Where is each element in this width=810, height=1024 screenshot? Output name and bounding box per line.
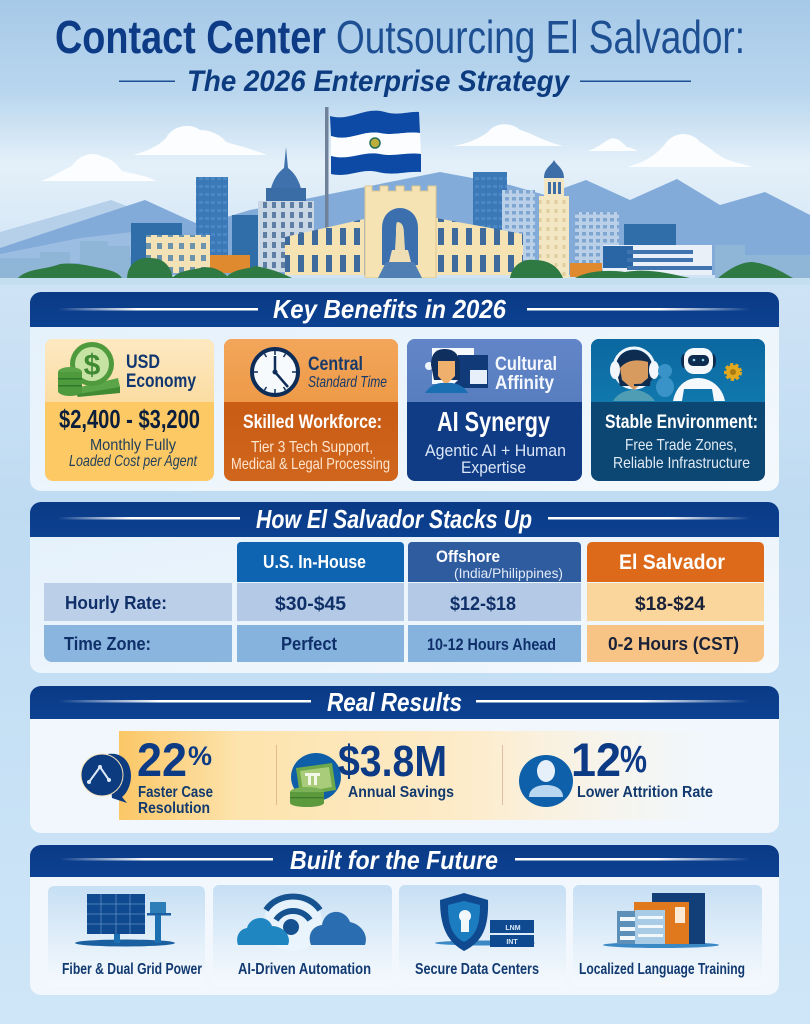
flag pole (325, 107, 328, 232)
icon: money (58, 342, 120, 397)
text: stable environment: Stable Environment: (605, 412, 758, 433)
row: hourly rate: $12-$18 (450, 594, 516, 615)
stat: $3.8M annual savings: Annual Savings (348, 784, 454, 801)
card: USD economy (45, 339, 214, 481)
heading: built for the future: Built for the Future (290, 845, 498, 875)
text: stable environment (605, 412, 758, 472)
title: Contact Center (55, 11, 326, 63)
icon: buildings (603, 893, 719, 948)
card: skilled workforce (224, 339, 398, 481)
waterfront strip (0, 278, 810, 285)
row: hourly rate: $30-$45 (275, 594, 346, 615)
column header: U.S. in-house: U.S. In-House (263, 552, 366, 572)
icon: solar panel (75, 894, 175, 946)
heading: how El Salvador stacks up: How El Salvador Stacks Up (256, 504, 532, 534)
label: central standard time: Standard Time (308, 374, 387, 391)
text: skilled workforce: Tier 3 Tech Support, (251, 439, 373, 456)
text: skilled workforce (231, 412, 390, 473)
mountains (0, 190, 810, 275)
yellow building left (146, 235, 210, 273)
column header: El Salvador: El Salvador (619, 551, 725, 574)
stat: 12% lower attrition rate: % (620, 739, 647, 781)
gold highlight band (119, 731, 709, 820)
background pale buildings (0, 241, 810, 278)
right buildings (570, 212, 712, 277)
panel: real results (30, 686, 779, 833)
right towers (473, 172, 507, 252)
text: stable environment: Reliable Infrastructure (613, 455, 750, 472)
label: central standard time (308, 354, 387, 391)
text: stable environment: Free Trade Zones, (625, 437, 737, 454)
icon: agent with headset and robot (610, 348, 740, 401)
stat: cost per agent: $2,400 - $3,200 (59, 404, 200, 434)
row: hourly rate (44, 583, 764, 621)
column header: U.S. in-house (237, 542, 404, 582)
stat: 12% lower attrition rate: 12 (571, 733, 621, 786)
icon: agent at monitor (425, 348, 488, 393)
text: AI synergy: AI Synergy (437, 406, 550, 437)
heading: key benefits (30, 292, 779, 327)
row: time zone: 0-2 Hours (CST) (608, 634, 739, 654)
label: cultural affinity: Affinity (495, 373, 554, 394)
stat: $3.8M annual savings (290, 737, 454, 807)
card: secure data centers: Secure Data Centers (415, 961, 539, 978)
icon: money: $ (84, 349, 101, 382)
stat: 22% faster case resolution: Faster Case (138, 784, 213, 801)
label: USD economy: Economy (126, 371, 196, 392)
column header: El Salvador (587, 542, 764, 582)
row: time zone (44, 625, 764, 662)
flag of El Salvador (330, 111, 421, 175)
heading: how El Salvador stacks up (30, 502, 779, 537)
bushes (18, 258, 793, 278)
text: skilled workforce: Medical & Legal Processing (231, 456, 390, 473)
card: localized language training (573, 885, 762, 986)
stat: 22% faster case resolution: 22 (137, 733, 187, 786)
clouds (41, 124, 753, 181)
icon: clock (252, 349, 298, 395)
icon: shield and server: INT (506, 939, 518, 946)
title (55, 11, 745, 63)
label: cultural affinity: Cultural (495, 354, 557, 375)
spire tower (258, 147, 314, 272)
icon: chat bubble (81, 754, 131, 803)
text: skilled workforce: Skilled Workforce: (243, 412, 382, 433)
card: AI-driven automation (213, 885, 392, 986)
panel: comparison table (30, 502, 779, 673)
orange building (210, 255, 250, 273)
column header: offshore (408, 542, 581, 582)
panel: key benefits (30, 292, 779, 491)
card: AI-driven automation: AI-Driven Automation (238, 961, 371, 978)
text: AI synergy: Expertise (461, 458, 526, 477)
label: cultural affinity (495, 354, 557, 394)
blue tower (196, 177, 228, 272)
column header: offshore: (India/Philippines) (454, 566, 563, 581)
row: hourly rate: $18-$24 (635, 594, 705, 615)
card: secure data centers (399, 885, 566, 986)
stat: 12% lower attrition rate (519, 733, 713, 807)
stat: 22% faster case resolution (81, 733, 213, 817)
bell tower (539, 160, 569, 278)
card: localized language training: Localized Language Training (579, 961, 745, 978)
row: time zone: Perfect (281, 634, 337, 654)
card: fiber and dual grid power (48, 886, 205, 986)
text: AI synergy (425, 406, 566, 477)
text: AI synergy: Agentic AI + Human (425, 441, 566, 460)
card: fiber and dual grid power: Fiber & Dual Grid Power (62, 961, 202, 978)
national palace (285, 186, 523, 278)
label: central standard time: Central (308, 354, 363, 375)
icon: wifi between clouds (237, 893, 366, 951)
icon: shield and server (435, 893, 535, 951)
stat: cost per agent: Loaded Cost per Agent (69, 453, 197, 470)
icon: shield and server: LNM (505, 925, 521, 932)
column header: offshore: Offshore (436, 547, 500, 566)
stat: 22% faster case resolution: % (188, 741, 212, 771)
card: stable environment (591, 339, 765, 481)
row: time zone: 10-12 Hours Ahead (427, 635, 556, 654)
heading: real results: Real Results (327, 687, 462, 717)
subtitle: The 2026 Enterprise Strategy (187, 65, 570, 98)
row: time zone: Time Zone: (64, 634, 151, 654)
stat: 12% lower attrition rate: Lower Attrition Rate (577, 784, 713, 801)
heading: real results (30, 686, 779, 719)
label: USD economy (126, 352, 196, 392)
heading: key benefits: Key Benefits in 2026 (273, 294, 506, 324)
stat: 22% faster case resolution: Resolution (138, 800, 210, 817)
icon: person (519, 755, 573, 807)
icon: money stack (290, 753, 341, 807)
heading: built for the future (30, 845, 779, 877)
panel: built for the future (30, 845, 779, 995)
card: AI synergy (407, 339, 582, 481)
stat: cost per agent (59, 404, 200, 470)
dark blue buildings (131, 215, 258, 272)
illustration: San Salvador skyline (0, 107, 810, 285)
stat: $3.8M annual savings: $3.8M (338, 737, 447, 786)
row: hourly rate: Hourly Rate: (65, 593, 167, 613)
stat: cost per agent: Monthly Fully (90, 437, 176, 454)
label: USD economy: USD (126, 352, 160, 373)
